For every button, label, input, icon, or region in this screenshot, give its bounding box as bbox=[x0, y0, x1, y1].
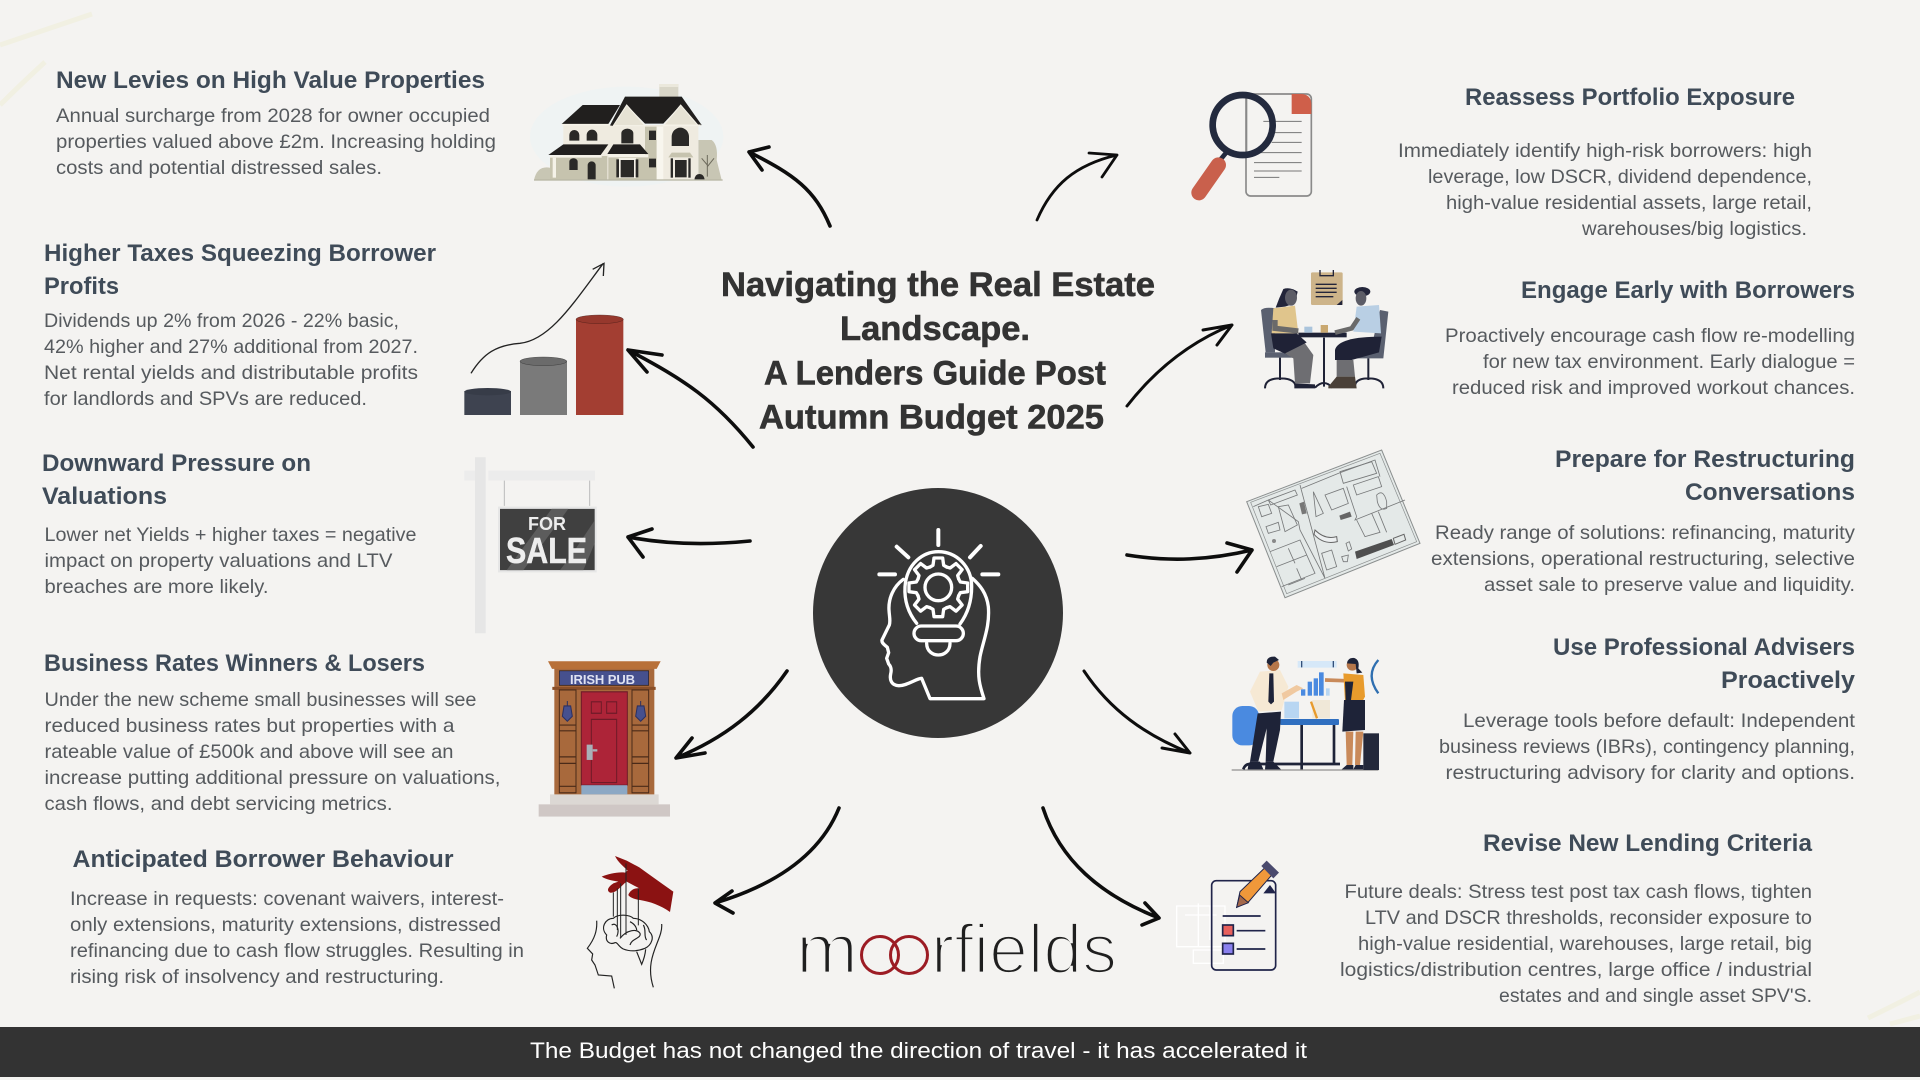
text: downward pressure body: impact on property valuations and LTV bbox=[44, 550, 392, 572]
panel: higher taxes bbox=[44, 240, 443, 410]
text: reassess portfolio body: leverage, low DSCR, dividend dependence, bbox=[1428, 166, 1812, 188]
text: anticipated behaviour body: only extensions, maturity extensions, distressed bbox=[70, 914, 501, 936]
text: business rates body: Under the new scheme small businesses will see bbox=[44, 689, 476, 711]
title: Landscape. bbox=[840, 310, 1030, 348]
panel: reassess portfolio bbox=[1398, 84, 1817, 240]
text: professional advisers body: restructuring advisory for clarity and options. bbox=[1446, 762, 1855, 784]
text: revise lending criteria body: estates and and single asset SPV'S. bbox=[1499, 985, 1812, 1007]
text: business rates body: increase putting additional pressure on valuations, bbox=[44, 767, 500, 789]
text: higher taxes body: 42% higher and 27% additional from 2027. bbox=[44, 336, 418, 358]
icon: magnifier on document bbox=[1199, 94, 1311, 196]
icon: floor plan bbox=[1247, 450, 1420, 598]
text: revise lending criteria body: LTV and DSCR thresholds, reconsider exposure to bbox=[1365, 907, 1812, 929]
heading: revise lending criteria: Revise New Lending Criteria bbox=[1483, 830, 1813, 857]
text: prepare for restructuring body: asset sale to preserve value and liquidity. bbox=[1484, 574, 1855, 596]
arrow: to checklist bbox=[1043, 808, 1159, 925]
arrow: to chart bbox=[628, 350, 753, 447]
panel: engage early bbox=[1445, 277, 1860, 399]
logo: moorfields: m bbox=[796, 910, 858, 988]
text: professional advisers body: Leverage tools before default: Independent bbox=[1463, 710, 1856, 732]
text: new levies body: costs and potential distressed sales. bbox=[56, 157, 382, 179]
heading: prepare for restructuring: Prepare for Restructuring bbox=[1555, 446, 1855, 473]
panel: new levies bbox=[56, 67, 501, 179]
title: Autumn Budget 2025 bbox=[759, 398, 1104, 436]
text: new levies body: properties valued above £2m. Increasing holding bbox=[56, 131, 496, 153]
heading: anticipated behaviour: Anticipated Borrower Behaviour bbox=[72, 846, 454, 873]
text: business rates body: rateable value of £500k and above will see an bbox=[44, 741, 454, 763]
heading: new levies: New Levies on High Value Properties bbox=[56, 67, 485, 94]
text: engage early body: Proactively encourage cash flow re-modelling bbox=[1445, 325, 1855, 347]
text: higher taxes body: Net rental yields and distributable profits bbox=[44, 362, 418, 384]
text: higher taxes body: Dividends up 2% from 2026 - 22% basic, bbox=[44, 310, 399, 332]
heading: downward pressure: Valuations bbox=[42, 483, 167, 510]
icon: bar chart with rising arrow bbox=[464, 263, 623, 415]
logo: moorfields: o bbox=[860, 910, 900, 988]
text: higher taxes body: for landlords and SPVs are reduced. bbox=[44, 388, 367, 410]
icon: people meeting at table bbox=[1261, 270, 1388, 388]
icon: checklist with pencil bbox=[1177, 861, 1279, 970]
text: business rates body: reduced business rates but properties with a bbox=[44, 715, 455, 737]
heading: business rates: Business Rates Winners & Losers bbox=[44, 650, 425, 677]
panel: revise lending criteria bbox=[1340, 830, 1817, 1007]
icon: for sale sign: FOR bbox=[528, 514, 566, 534]
text: professional advisers body: business reviews (IBRs), contingency planning, bbox=[1439, 736, 1855, 758]
central circle icon: head with lightbulb and gear bbox=[813, 488, 1063, 738]
text: anticipated behaviour body: rising risk of insolvency and restructuring. bbox=[70, 966, 444, 988]
logo: moorfields: rfields bbox=[931, 910, 1117, 988]
text: revise lending criteria body: Future deals: Stress test post tax cash flows, tighten bbox=[1344, 881, 1812, 903]
panel: anticipated behaviour bbox=[70, 846, 529, 988]
text: prepare for restructuring body: extensions, operational restructuring, selective bbox=[1431, 548, 1855, 570]
panel: downward pressure bbox=[42, 450, 422, 598]
text: anticipated behaviour body: Increase in requests: covenant waivers, interest- bbox=[70, 888, 504, 910]
logo: moorfields: o bbox=[889, 910, 929, 988]
text: prepare for restructuring body: Ready range of solutions: refinancing, maturity bbox=[1435, 522, 1855, 544]
arrow: to for sale sign bbox=[628, 529, 750, 557]
text: reassess portfolio body: high-value residential assets, large retail, bbox=[1446, 192, 1812, 214]
logo: moorfields bbox=[796, 910, 1117, 988]
text: anticipated behaviour body: refinancing due to cash flow struggles. Resulting in bbox=[70, 940, 524, 962]
text: engage early body: reduced risk and improved workout chances. bbox=[1452, 377, 1855, 399]
footer banner: The Budget has not changed the direction of travel - it has accelerated it bbox=[530, 1038, 1307, 1063]
text: revise lending criteria body: high-value residential, warehouses, large retail, big bbox=[1358, 933, 1812, 955]
panel: professional advisers bbox=[1439, 634, 1862, 784]
arrow: to floor plan bbox=[1127, 543, 1252, 572]
text: business rates body: cash flows, and debt servicing metrics. bbox=[44, 793, 392, 815]
arrow: to brain bbox=[715, 808, 839, 913]
footer banner bbox=[0, 1027, 1920, 1077]
heading: engage early: Engage Early with Borrowers bbox=[1521, 277, 1855, 304]
text: downward pressure body: breaches are more likely. bbox=[44, 576, 268, 598]
text: new levies body: Annual surcharge from 2028 for owner occupied bbox=[56, 105, 490, 127]
title: Navigating the Real Estate bbox=[721, 266, 1155, 304]
heading: professional advisers: Proactively bbox=[1721, 667, 1856, 694]
text: revise lending criteria body: logistics/distribution centres, large office / industrial bbox=[1340, 959, 1812, 981]
panel: prepare for restructuring bbox=[1431, 446, 1862, 596]
arrow: to magnifier bbox=[1037, 153, 1117, 220]
title: A Lenders Guide Post bbox=[764, 354, 1106, 392]
heading: reassess portfolio: Reassess Portfolio Exposure bbox=[1465, 84, 1795, 111]
icon: advisers with chart bbox=[1232, 657, 1379, 770]
icon: house bbox=[530, 84, 723, 187]
arrow: to pub bbox=[676, 671, 787, 758]
arrow: to meeting bbox=[1127, 325, 1232, 406]
icon: puppet hand controlling brain bbox=[587, 856, 673, 988]
arrow: to advisers bbox=[1084, 671, 1190, 753]
icon: for sale sign bbox=[464, 457, 597, 633]
panel: business rates bbox=[44, 650, 506, 815]
text: reassess portfolio body: warehouses/big logistics. bbox=[1581, 218, 1807, 240]
icon: irish pub door: IRISH PUB bbox=[570, 672, 635, 687]
text: engage early body: for new tax environment. Early dialogue = bbox=[1483, 351, 1855, 373]
text: downward pressure body: Lower net Yields + higher taxes = negative bbox=[44, 524, 417, 546]
heading: higher taxes: Higher Taxes Squeezing Borrower bbox=[44, 240, 436, 267]
heading: prepare for restructuring: Conversations bbox=[1685, 479, 1855, 506]
heading: downward pressure: Downward Pressure on bbox=[42, 450, 311, 477]
icon: irish pub door bbox=[539, 661, 670, 817]
text: reassess portfolio body: Immediately identify high-risk borrowers: high bbox=[1398, 140, 1812, 162]
heading: higher taxes: Profits bbox=[44, 273, 119, 300]
icon: for sale sign: SALE bbox=[506, 530, 587, 571]
heading: professional advisers: Use Professional Advisers bbox=[1553, 634, 1855, 661]
arrow: to house bbox=[749, 147, 830, 226]
